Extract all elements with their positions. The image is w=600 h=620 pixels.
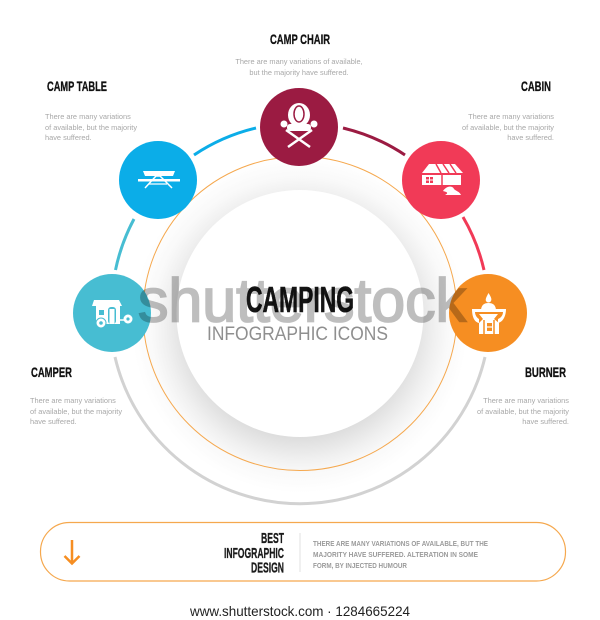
heading: camper: There are many variations [30,396,116,405]
heading: camper [30,364,122,426]
heading: camp table: of available, but the majority [45,123,137,132]
callout text: MAJORITY HAVE SUFFERED. ALTERATION IN SOME [313,552,478,559]
heading: camper: CAMPER [31,364,72,380]
callout text: FORM, BY INJECTED HUMOUR [313,563,407,570]
heading: cabin: CABIN [521,78,551,94]
callout text [313,541,488,570]
heading: camp table: CAMP TABLE [47,78,107,94]
icon: camp chair [260,88,338,166]
subtitle: INFOGRAPHIC ICONS [207,324,388,345]
callout heading: INFOGRAPHIC [224,546,284,562]
orange inner ring [143,156,457,470]
arc: table to chair [194,128,256,155]
arc: lower grey ring [115,357,485,504]
icon: camp table [119,141,197,219]
heading: camp table: There are many variations [45,112,131,121]
heading: cabin [462,78,554,142]
heading: cabin: There are many variations [468,112,554,121]
callout heading: DESIGN [251,560,284,576]
heading: burner: of available, but the majority [477,407,569,416]
heading: burner: There are many variations [483,396,569,405]
centre disc with shadow [132,157,468,493]
heading: cabin: have suffered. [507,133,554,142]
heading: camper: have suffered. [30,417,77,426]
footer: www.shutterstock.com · 1284665224 [189,603,410,619]
title: CAMPING [246,279,354,320]
heading: burner: have suffered. [522,417,569,426]
heading: camp table: have suffered. [45,133,92,142]
heading: burner: BURNER [525,364,566,380]
heading: camp chair: but the majority have suffered. [249,68,349,77]
watermark: shutterstock [138,266,466,334]
icon: down arrow [64,540,80,564]
callout heading [224,531,284,576]
heading: cabin: of available, but the majority [462,123,554,132]
heading: camp chair [235,31,363,77]
callout text: THERE ARE MANY VARIATIONS OF AVAILABLE, BUT THE [313,541,488,548]
heading: camp table [45,78,137,142]
heading: camper: of available, but the majority [30,407,122,416]
arc: cabin to burner [463,217,484,270]
heading: camp chair: CAMP CHAIR [270,31,330,47]
arc: chair to cabin [343,128,405,155]
heading: camp chair: There are many variations of available, [235,57,363,66]
arc: camper to table [116,219,134,270]
callout heading: BEST [261,531,284,547]
heading: burner [477,364,569,426]
panel: bottom callout [40,522,566,581]
icon: camper [73,274,151,352]
icon: burner [449,274,527,352]
icon: cabin [402,141,480,219]
